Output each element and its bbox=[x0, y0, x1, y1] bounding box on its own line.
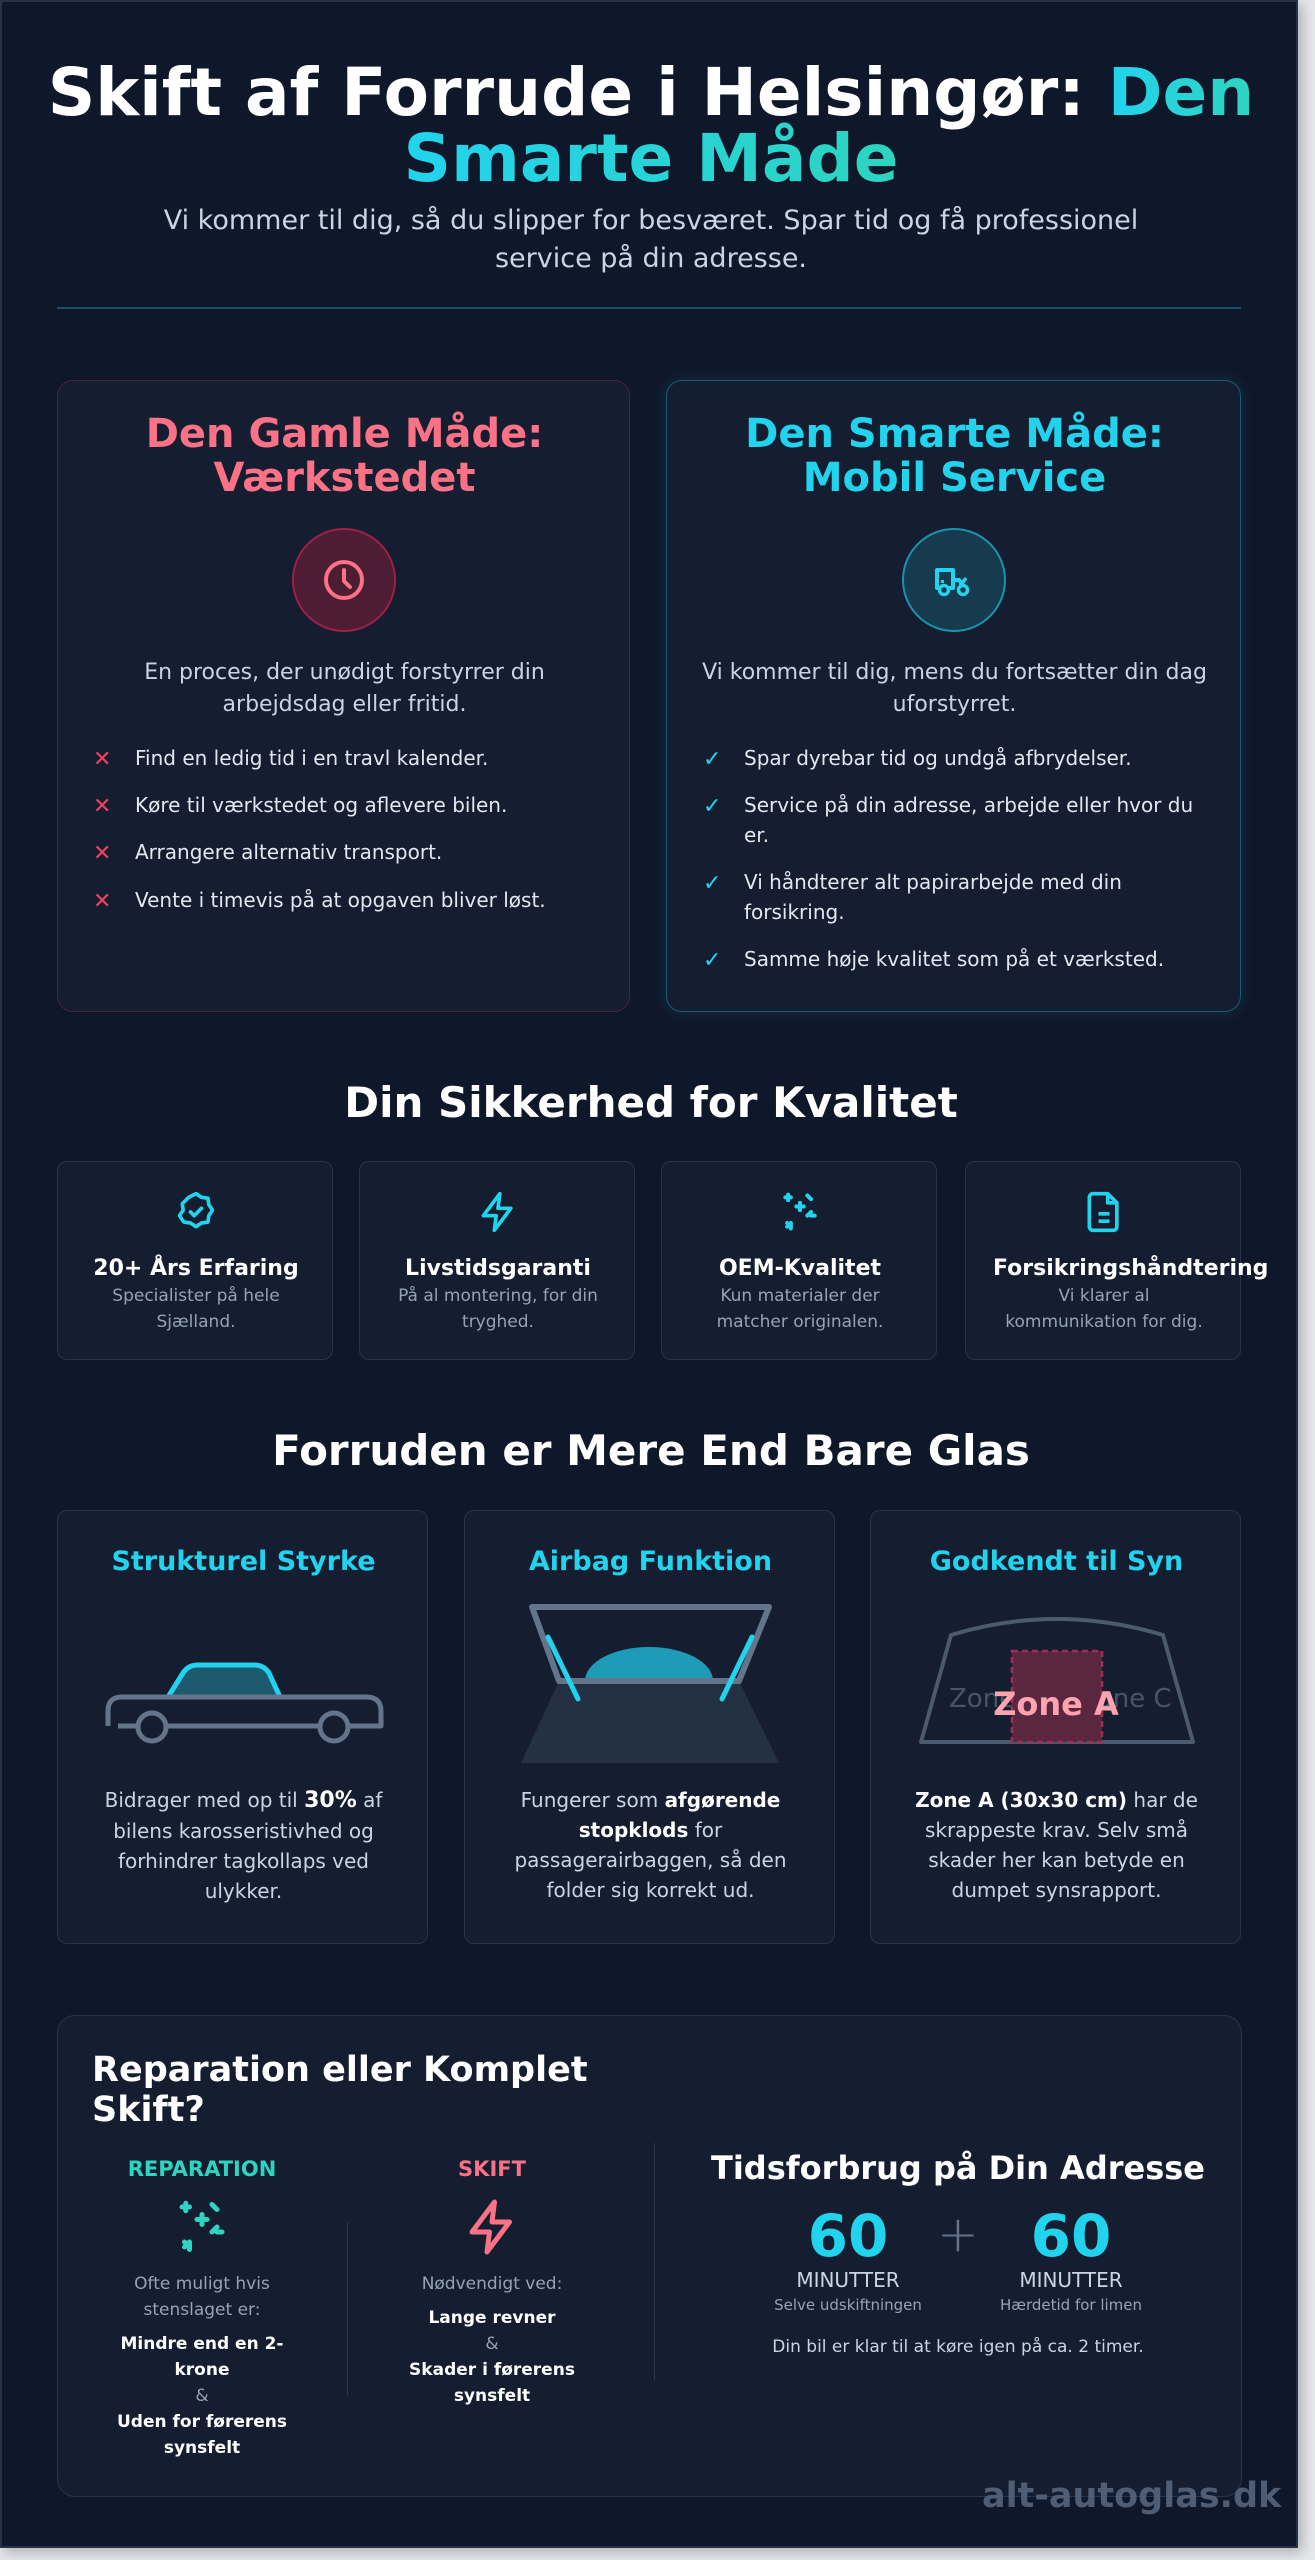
icon: truck bbox=[902, 528, 1006, 632]
text: warranty: Livstidsgaranti bbox=[405, 1256, 591, 1281]
watermark: alt-autoglas.dk bbox=[982, 2476, 1281, 2516]
illustration: zones bbox=[919, 1617, 1195, 1744]
stat: 60 + 60: Hærdetid for limen bbox=[1000, 2296, 1142, 2314]
list: smart way bbox=[703, 746, 1193, 973]
column: replace: Lange revner bbox=[428, 2308, 556, 2328]
block: time usage: Din bil er klar til at køre igen på ca. 2 timer. bbox=[772, 2337, 1144, 2357]
column: repair: REPARATION bbox=[128, 2157, 276, 2181]
stat: 60 + 60 bbox=[774, 2202, 1142, 2314]
column: repair bbox=[117, 2157, 287, 2458]
text: insurance bbox=[993, 1255, 1268, 1332]
heading: old way bbox=[146, 411, 543, 501]
icon: clock bbox=[292, 528, 396, 632]
text: OEM: OEM-Kvalitet bbox=[719, 1256, 881, 1281]
column: replace: SKIFT bbox=[458, 2157, 526, 2181]
list: old way: Vente i timevis på at opgaven bliver løst. bbox=[135, 888, 546, 912]
column: replace bbox=[409, 2157, 575, 2406]
title: Smarte Måde bbox=[404, 120, 898, 197]
heading: airbag: Airbag Funktion bbox=[529, 1546, 772, 1577]
heading: old way: Værkstedet bbox=[214, 455, 475, 501]
illustration: car bbox=[106, 1662, 384, 1744]
text: airbag: Fungerer som afgørende stopklods for passagerairbaggen, så den folder sig korrekt ud. bbox=[514, 1788, 787, 1902]
text: experience: Specialister på hele Sjælland. bbox=[112, 1286, 280, 1332]
list: old way: Find en ledig tid i en travl kalender. bbox=[135, 746, 488, 770]
stat: 60 + 60: 60 bbox=[808, 2202, 888, 2270]
column: repair: Uden for førerens synsfelt bbox=[117, 2412, 287, 2458]
panel: warranty bbox=[359, 1161, 635, 1360]
illustration: zones: Zone B bbox=[949, 1684, 1041, 1714]
panel: airbag bbox=[464, 1510, 835, 1944]
panel: experience bbox=[57, 1161, 333, 1360]
heading: repair or replace: Reparation eller Komplet Skift? bbox=[92, 2050, 588, 2130]
block: time usage bbox=[711, 2149, 1205, 2357]
text: smart way description: Vi kommer til dig, mens du fortsætter din dag uforstyrret. bbox=[702, 660, 1207, 717]
panel: OEM bbox=[661, 1161, 937, 1360]
list: old way: ✕ bbox=[93, 794, 111, 819]
heading: smart way bbox=[745, 411, 1164, 501]
column: repair: Ofte muligt hvis stenslaget er: bbox=[134, 2274, 270, 2320]
heading: structural: Strukturel Styrke bbox=[111, 1546, 376, 1577]
title: Skift af Forrude i Helsingør: Den bbox=[48, 54, 1254, 131]
stat: 60 + 60: MINUTTER bbox=[1019, 2268, 1123, 2292]
icon: sparkles bbox=[783, 1192, 817, 1230]
panel: old way bbox=[57, 380, 630, 1012]
list: smart way: Vi håndterer alt papirarbejde med din forsikring. bbox=[744, 870, 1122, 924]
text: experience: 20+ Års Erfaring bbox=[93, 1256, 299, 1281]
illustration: zones: Zone C bbox=[1079, 1684, 1172, 1714]
panel: inspection bbox=[870, 1510, 1241, 1944]
heading: old way: Den Gamle Måde: bbox=[146, 411, 543, 457]
illustration: zones: Zone A bbox=[993, 1685, 1119, 1723]
list: old way: Køre til værkstedet og aflevere bilen. bbox=[135, 793, 507, 817]
list: smart way: ✓ bbox=[703, 871, 721, 896]
stat: 60 + 60: 60 bbox=[1031, 2202, 1111, 2270]
heading: smart way: Den Smarte Måde: bbox=[745, 411, 1164, 457]
icon: badge check bbox=[178, 1192, 214, 1228]
heading: more than glass: Forruden er Mere End Bare Glas bbox=[272, 1426, 1030, 1475]
column: repair: Mindre end en 2-krone bbox=[120, 2334, 284, 2380]
list: old way: ✕ bbox=[93, 889, 111, 914]
list: old way bbox=[93, 746, 546, 914]
list: smart way: Spar dyrebar tid og undgå afbrydelser. bbox=[744, 746, 1132, 770]
illustration: airbag bbox=[521, 1604, 779, 1763]
list: smart way: ✓ bbox=[703, 747, 721, 772]
icon: lightning bbox=[470, 2200, 512, 2254]
heading: inspection: Godkendt til Syn bbox=[930, 1546, 1183, 1577]
list: old way: ✕ bbox=[93, 747, 111, 772]
list: smart way: ✓ bbox=[703, 794, 721, 819]
list: smart way: Samme høje kvalitet som på et værksted. bbox=[744, 947, 1164, 971]
text: inspection: Zone A (30x30 cm) har de skrappeste krav. Selv små skader her kan betyde en dumpet synsrapport. bbox=[915, 1788, 1198, 1902]
block: time usage: Tidsforbrug på Din Adresse bbox=[711, 2149, 1205, 2187]
list: smart way: Service på din adresse, arbejde eller hvor du er. bbox=[744, 793, 1193, 847]
panel: repair or replace bbox=[57, 2015, 1242, 2497]
panel: structural strength bbox=[57, 1510, 428, 1944]
title bbox=[48, 54, 1254, 197]
column: replace: Nødvendigt ved: bbox=[422, 2274, 562, 2294]
column: replace: Skader i førerens synsfelt bbox=[409, 2360, 575, 2406]
stat: 60 + 60: MINUTTER bbox=[796, 2268, 900, 2292]
text: old way description: En proces, der unødigt forstyrrer din arbejdsdag eller fritid. bbox=[144, 660, 545, 717]
list: old way: ✕ bbox=[93, 841, 111, 866]
text: warranty: På al montering, for din tryghed. bbox=[398, 1286, 598, 1332]
column: repair: & bbox=[195, 2386, 209, 2406]
list: smart way: ✓ bbox=[703, 948, 721, 973]
list: old way: Arrangere alternativ transport. bbox=[135, 840, 442, 864]
text: insurance: kommunikation for dig. bbox=[1005, 1312, 1203, 1332]
column: replace: & bbox=[485, 2334, 499, 2354]
text: warranty bbox=[398, 1256, 598, 1332]
heading: quality: Din Sikkerhed for Kvalitet bbox=[344, 1078, 958, 1127]
panel: insurance bbox=[965, 1161, 1241, 1360]
stat: 60 + 60: Selve udskiftningen bbox=[774, 2296, 922, 2314]
icon: file bbox=[1088, 1192, 1119, 1232]
heading: smart way: Mobil Service bbox=[803, 455, 1106, 501]
icon: zap bbox=[481, 1192, 513, 1232]
panel: smart way bbox=[666, 380, 1241, 1012]
text: experience bbox=[93, 1254, 299, 1332]
text: OEM bbox=[717, 1256, 883, 1332]
subtitle: Vi kommer til dig, så du slipper for besværet. Spar tid og få professionel service på din adresse. bbox=[164, 205, 1138, 274]
text: structural: Bidrager med op til 30% af bilens karosseristivhed og forhindrer tagkollaps ved ulykker. bbox=[105, 1788, 382, 1903]
icon: sparkles bbox=[180, 2200, 224, 2252]
stat: 60 + 60: + bbox=[937, 2205, 979, 2263]
text: OEM: Kun materialer der matcher originalen. bbox=[717, 1286, 883, 1332]
text: insurance: Vi klarer al bbox=[1058, 1286, 1149, 1306]
text: insurance: Forsikringshåndtering bbox=[993, 1256, 1268, 1281]
